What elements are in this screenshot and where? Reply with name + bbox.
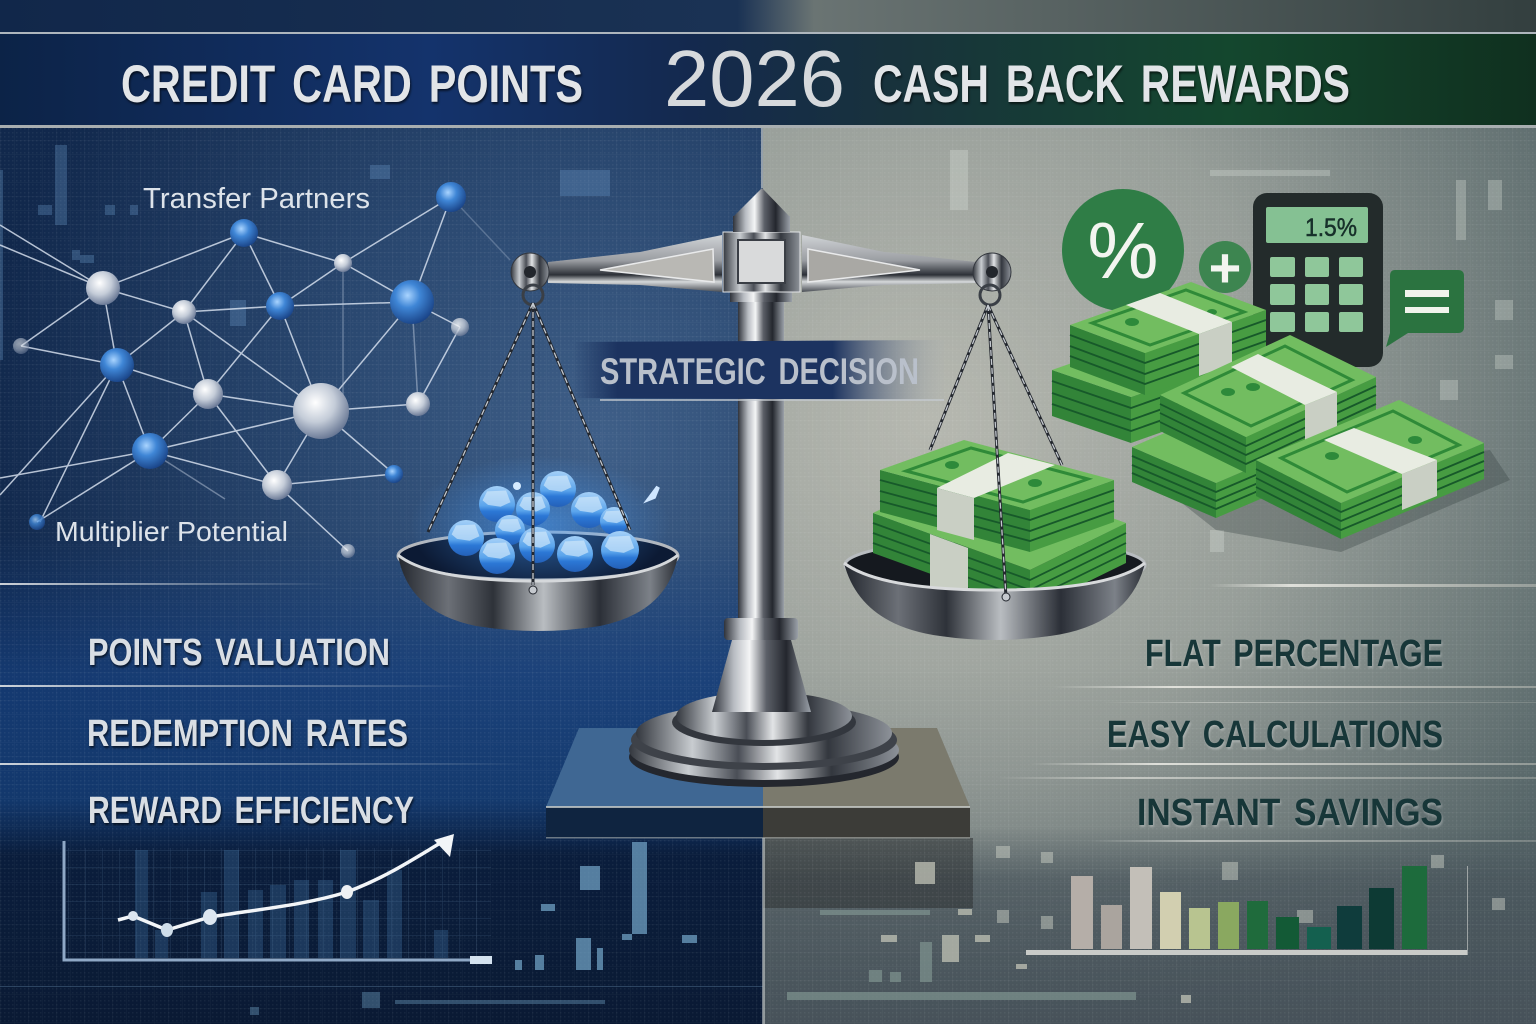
banner text: STRATEGIC DECISION [600, 351, 919, 392]
right dividers [997, 584, 1536, 842]
percent badge [1062, 189, 1184, 311]
left dividers [0, 583, 530, 765]
calculator display: 1.5% [1305, 214, 1357, 242]
plus badge [1199, 236, 1251, 299]
base [629, 618, 899, 787]
cash stack: front right [1256, 400, 1484, 539]
center divider [761, 128, 765, 1024]
right chains [930, 285, 1062, 601]
title: year: 2026 [664, 34, 845, 123]
line chart [64, 834, 492, 964]
pan cash upper stack [880, 440, 1114, 552]
post [738, 295, 784, 635]
right list: flat percentage: FLAT PERCENTAGE [1145, 633, 1443, 675]
right pan with cash [844, 440, 1145, 640]
calculator [1253, 193, 1383, 367]
left chains [428, 285, 630, 594]
background: cash back side [763, 127, 1536, 1024]
cash stack: bottom middle [1132, 394, 1340, 518]
bar chart [1026, 866, 1468, 955]
strategic decision banner [573, 340, 944, 401]
plus badge: + [1209, 236, 1241, 299]
left list: points valuation: POINTS VALUATION [88, 632, 390, 674]
percent badge: % [1087, 206, 1159, 295]
network diagram [0, 182, 510, 558]
label: multiplier potential: Multiplier Potential [55, 516, 288, 547]
pivots [511, 253, 1011, 291]
left list: redemption rates: REDEMPTION RATES [87, 713, 408, 755]
ground shadow under cash [1140, 450, 1510, 552]
equals bubble [1386, 270, 1464, 347]
scale [511, 188, 1011, 787]
header band [0, 32, 1536, 128]
pan cash lower stack [873, 466, 1126, 610]
top strip [0, 0, 1536, 34]
left list: reward efficiency: REWARD EFFICIENCY [88, 790, 414, 832]
beam [548, 188, 976, 302]
label: transfer partners: Transfer Partners [143, 183, 370, 215]
cash stack: middle [1160, 335, 1376, 473]
cash stack: top [1070, 282, 1266, 395]
background: points side [0, 0, 763, 1024]
cash stack: back left [1052, 328, 1250, 443]
left pan with points [398, 455, 678, 631]
blue point gems [410, 455, 670, 595]
right list: instant savings: INSTANT SAVINGS [1137, 792, 1443, 834]
pan bowl front [844, 563, 1145, 640]
right list: easy calculations: EASY CALCULATIONS [1107, 714, 1443, 756]
title: cash back rewards: CASH BACK REWARDS [873, 55, 1350, 114]
plinth [546, 728, 970, 838]
title: credit card points: CREDIT CARD POINTS [121, 55, 583, 114]
